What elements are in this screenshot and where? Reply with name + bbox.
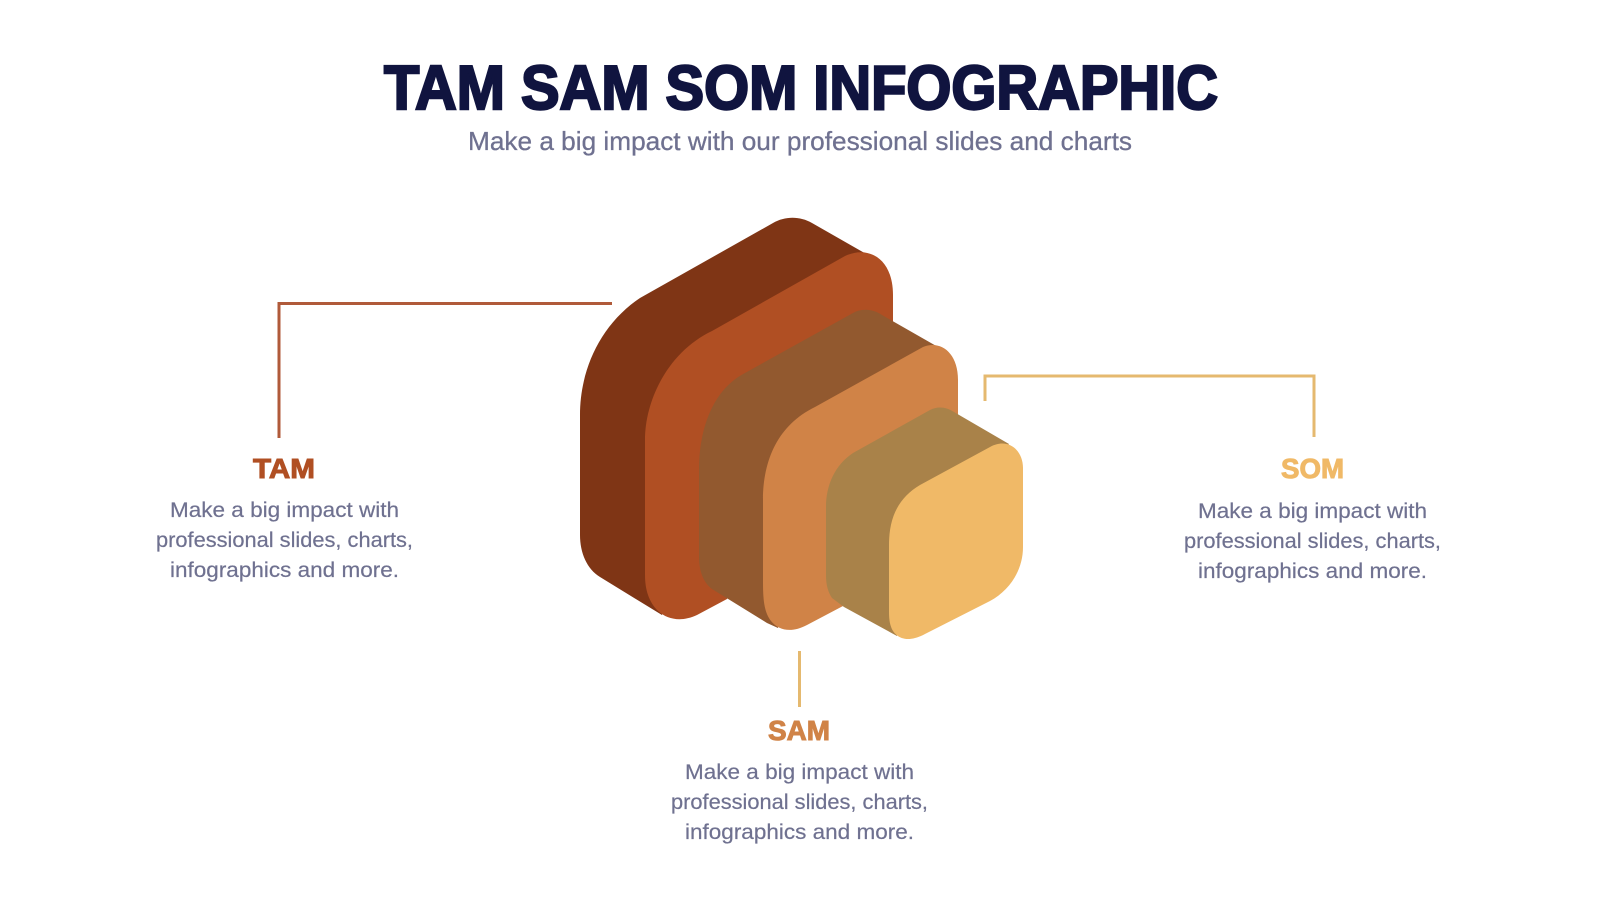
SOM layer side bbox=[826, 408, 1009, 636]
TAM callout: Make a big impact with bbox=[170, 499, 399, 522]
SOM callout: SOM bbox=[1281, 453, 1344, 484]
SAM layer side bbox=[699, 310, 938, 628]
SAM callout: professional slides, charts, bbox=[671, 791, 928, 814]
SAM layer front bbox=[763, 345, 958, 630]
TAM connector line bbox=[279, 304, 612, 438]
SAM callout: Make a big impact with bbox=[685, 761, 914, 784]
SOM layer front bbox=[889, 444, 1023, 639]
TAM layer side bbox=[580, 218, 868, 615]
TAM callout bbox=[156, 453, 413, 582]
subtitle: Make a big impact with our professional slides and charts bbox=[468, 126, 1132, 156]
SAM callout: SAM bbox=[768, 715, 830, 746]
SOM callout: Make a big impact with bbox=[1198, 500, 1427, 523]
TAM layer front bbox=[645, 252, 893, 619]
SOM callout: infographics and more. bbox=[1198, 560, 1427, 583]
SAM callout bbox=[671, 715, 928, 844]
title: TAM SAM SOM INFOGRAPHIC bbox=[384, 54, 1218, 123]
TAM callout: infographics and more. bbox=[170, 559, 399, 582]
TAM callout: TAM bbox=[253, 453, 315, 484]
TAM callout: professional slides, charts, bbox=[156, 529, 413, 552]
SAM callout: infographics and more. bbox=[685, 821, 914, 844]
SOM connector line bbox=[985, 376, 1314, 437]
SAM connector line bbox=[798, 651, 801, 707]
chart: stacked isometric TAM SAM SOM layers bbox=[580, 218, 1023, 639]
SOM callout: professional slides, charts, bbox=[1184, 530, 1441, 553]
SOM callout bbox=[1184, 453, 1441, 583]
